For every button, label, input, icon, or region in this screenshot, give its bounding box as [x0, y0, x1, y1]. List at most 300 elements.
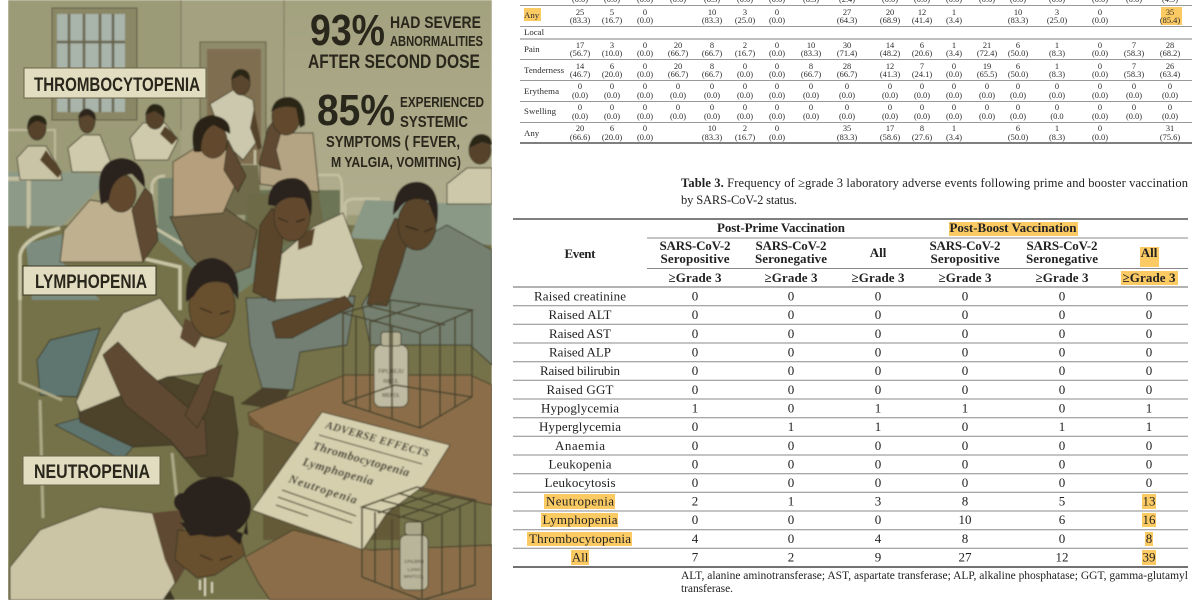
table 3 header: Seropositive	[930, 251, 1000, 266]
adverse effects paper: Lymphopenia	[300, 454, 375, 488]
row: swelling: (0.0)	[572, 112, 588, 121]
row: any: 20	[886, 8, 894, 17]
stat: 85 percent systemic symptoms	[318, 94, 484, 170]
row: erythema: (0.0)	[839, 91, 855, 100]
table 3 event names: Hypoglycemia	[541, 400, 619, 416]
row: swelling: 0	[1098, 103, 1102, 112]
row: any local: (3.4)	[946, 133, 962, 142]
row: erythema: 0	[578, 82, 582, 91]
table 3 values: 0	[875, 307, 881, 322]
row: erythema: 0	[809, 82, 813, 91]
row: swelling: (0.0)	[737, 112, 753, 121]
stat: 85 percent systemic symptoms: SYSTEMIC	[400, 114, 468, 131]
table 3 values: 27	[958, 550, 972, 564]
row: erythema: (0.0)	[1126, 91, 1142, 100]
row: swelling: 0	[775, 103, 779, 112]
table 3 values: 1	[1059, 419, 1065, 434]
table 3 values: 0	[962, 419, 968, 434]
patient: foreground woman vomiting	[10, 477, 251, 600]
row: pain: (10.0)	[602, 49, 622, 58]
table 3 event names: Neutropenia	[546, 494, 614, 508]
row: any: 12	[918, 8, 926, 17]
table 3 header: SARS-CoV-2	[1026, 238, 1098, 253]
table 3 footnote: ALT, alanine aminotransferase; AST, aspartate transferase; ALP, alkaline phosphatase; GGT, gamma-glutamyl	[681, 570, 1188, 582]
table 3 values: 0	[875, 438, 881, 453]
row: erythema: 0	[610, 82, 614, 91]
row: any local: (8.3)	[1049, 133, 1065, 142]
row: erythema: 0	[1055, 82, 1059, 91]
table 3 values: 3	[875, 494, 881, 508]
table 3 values: 0	[1059, 363, 1065, 378]
row: pain: (68.2)	[1160, 49, 1180, 58]
row: erythema: (0.0)	[704, 91, 720, 100]
row: pain: (0.0)	[637, 49, 653, 58]
table 3 values: 0	[1059, 382, 1065, 397]
table 3 values: 0	[788, 400, 794, 416]
table 3 values: 0	[1146, 382, 1152, 397]
table 2 highlights	[524, 7, 1182, 25]
table 3 values: 0	[875, 512, 881, 527]
row: tenderness: 12	[886, 62, 894, 71]
table 3 values: 0	[875, 475, 881, 490]
row: swelling: 0	[710, 103, 714, 112]
table 3 header: ≥Grade 3	[668, 270, 722, 285]
row: pain: (83.3)	[801, 49, 821, 58]
row: swelling: 0	[1168, 103, 1172, 112]
row: any: 0	[775, 8, 779, 17]
row: erythema: 0	[1132, 82, 1136, 91]
table 3 header: All	[1141, 245, 1158, 260]
table 3 values: 0	[1146, 475, 1152, 490]
table 3 values: 12	[1056, 550, 1068, 564]
background beds and sheets	[8, 130, 492, 310]
row: erythema: (0.0)	[1049, 91, 1065, 100]
row: pain: 14	[886, 41, 895, 50]
table 3 header: ≥Grade 3	[1122, 270, 1176, 285]
label: thrombocytopenia: THROMBOCYTOPENIA	[34, 75, 200, 96]
row: erythema	[524, 82, 1178, 100]
table 3 header: ≥Grade 3	[938, 270, 992, 285]
table 3 values: 9	[875, 550, 881, 564]
row: any local: 10	[708, 124, 716, 133]
row: tenderness: 0	[952, 62, 956, 71]
stat: 85 percent systemic symptoms: M YALGIA, VOMITING)	[331, 154, 461, 171]
row: erythema: 0	[743, 82, 747, 91]
row: erythema: 0	[845, 82, 849, 91]
row: any local: 6	[1016, 124, 1020, 133]
table 3 values: 0	[962, 475, 968, 490]
adverse effects paper: ADVERSE EFFECTS	[323, 419, 430, 460]
vial in cage, upper: WEPOL	[382, 393, 400, 399]
row: any: 3	[743, 8, 747, 17]
row: pain: 0	[1098, 41, 1102, 50]
row: pain: 6	[920, 41, 924, 50]
row: any local: (0.0)	[769, 133, 785, 142]
row: any local: 0	[643, 124, 647, 133]
vial in cage, lower: WHITCOL	[404, 574, 425, 579]
table 3 header: ≥Grade 3	[764, 270, 818, 285]
table 3 event names: Lymphopenia	[542, 512, 618, 527]
row: tenderness: 8	[809, 62, 813, 71]
table 2 rules	[520, 6, 1192, 143]
row: pain: (58.3)	[1124, 49, 1144, 58]
table 3 footnote	[681, 570, 1188, 595]
row: swelling: (0.0)	[839, 112, 855, 121]
row: tenderness: (0.0)	[946, 70, 962, 79]
label: neutropenia	[23, 456, 160, 485]
table 3 event names: Raised ALT	[548, 307, 612, 322]
row: pain: (71.4)	[837, 49, 857, 58]
row: tenderness: 26	[1166, 62, 1174, 71]
row: any: Any	[524, 10, 540, 20]
row: tenderness: (20.0)	[602, 70, 622, 79]
table 3 values: 0	[962, 326, 968, 341]
table 3 values: 1	[692, 400, 698, 416]
row: any local: 1	[1055, 124, 1059, 133]
door	[200, 42, 266, 164]
row: any: (0.0)	[1092, 16, 1108, 25]
table 3 values: 0	[962, 382, 968, 397]
row: swelling: 0	[920, 103, 924, 112]
row: tenderness: 20	[674, 62, 682, 71]
row: any: 0	[643, 8, 647, 17]
row: pain: 0	[643, 41, 647, 50]
row: any: 25	[576, 8, 584, 17]
table 3 values: 0	[1059, 307, 1065, 322]
row: erythema: (0.0)	[737, 91, 753, 100]
row: swelling	[524, 103, 1178, 121]
row: tenderness: 7	[1132, 62, 1136, 71]
row: any: 10	[708, 8, 716, 17]
table 3 values: 0	[692, 512, 698, 527]
row: erythema: (0.0)	[979, 91, 995, 100]
table 3 values: 1	[875, 400, 881, 416]
table 3 header: SARS-CoV-2	[660, 238, 730, 253]
table 3 values: 39	[1142, 550, 1156, 564]
row: swelling: (0.0)	[704, 112, 720, 121]
row: erythema: 0	[920, 82, 924, 91]
table 3 values: 8	[1146, 531, 1152, 546]
table 3 values: 0	[1146, 344, 1152, 360]
row: tenderness: 14	[576, 62, 585, 71]
table 3 event names: Leukopenia	[548, 456, 612, 472]
row: any: (85.4)	[1160, 16, 1180, 25]
vial in cage, upper	[343, 300, 472, 428]
table 3 values: 0	[962, 344, 968, 360]
row: pain: (66.7)	[702, 49, 722, 58]
row: pain: 0	[775, 41, 779, 50]
vial in cage, upper: RIBEIL	[383, 379, 399, 385]
table 3 highlights	[527, 222, 1178, 565]
table 3 header: ≥Grade 3	[852, 270, 905, 285]
row: tenderness: (8.3)	[1049, 70, 1065, 79]
row: pain: 3	[610, 41, 614, 50]
stat: 93 percent severe abnormalities	[308, 14, 482, 68]
background patients	[17, 69, 492, 215]
table 3 values: 0	[788, 438, 794, 453]
row: erythema: (0.0)	[946, 91, 962, 100]
row: swelling: (0.0)	[769, 112, 785, 121]
row: swelling: 0	[643, 103, 647, 112]
row: tenderness: (0.0)	[637, 70, 653, 79]
table 3 values: 1	[788, 494, 794, 508]
row: swelling: (0.0)	[604, 112, 620, 121]
row: any: (25.0)	[735, 16, 755, 25]
label: lymphopenia	[23, 266, 156, 295]
row: pain: (0.0)	[769, 49, 785, 58]
row: any local: 31	[1166, 124, 1174, 133]
table 3 header: All	[870, 245, 887, 260]
stat: 93 percent severe abnormalities: HAD SEVERE	[390, 13, 481, 32]
table 3 values: 0	[1059, 531, 1065, 546]
row: swelling: (0.0	[1050, 112, 1064, 121]
table 3 values: 0	[692, 382, 698, 397]
row: erythema: (0.0)	[1162, 91, 1178, 100]
table 3 values: 0	[692, 288, 698, 304]
table 3 values: 0	[1146, 363, 1152, 378]
patient: woman left holding head	[60, 158, 158, 262]
row: swelling: (0.0)	[914, 112, 930, 121]
table 3 values: 0	[788, 475, 794, 490]
row: erythema: (0.0)	[637, 91, 653, 100]
table 3 values: 0	[692, 419, 698, 434]
row: erythema: 0	[985, 82, 989, 91]
row: pain: 28	[1166, 41, 1174, 50]
table 3 footnote: transferase.	[681, 583, 733, 595]
row: erythema: 0	[888, 82, 892, 91]
row: pain: 7	[1132, 41, 1136, 50]
row: erythema: (0.0)	[769, 91, 785, 100]
row: any: (64.3)	[837, 16, 857, 25]
table 3 header: SARS-CoV-2	[756, 238, 826, 253]
table 3 values: 0	[875, 456, 881, 472]
table 3 caption: Table 3. Frequency of ≥grade 3 laboratory adverse events following prime and booster vaccination	[681, 176, 1189, 190]
table 3 values: 0	[788, 307, 794, 322]
row: any: (41.4)	[912, 16, 932, 25]
row: pain: 10	[807, 41, 815, 50]
table 3 values: 1	[1146, 419, 1152, 434]
table 3 values: 0	[1146, 307, 1152, 322]
row: any local: (20.0)	[602, 133, 622, 142]
patient: man with white shirt	[240, 178, 363, 410]
row: swelling: 0	[676, 103, 680, 112]
table 3 values: 0	[692, 307, 698, 322]
table 3 header: ≥Grade 3	[1036, 270, 1089, 285]
patient: woman seated centre	[170, 115, 257, 282]
row: tenderness: 0	[643, 62, 647, 71]
table 3 values: 0	[875, 363, 881, 378]
row: any: 35	[1166, 8, 1174, 17]
table 3 values: 0	[1059, 475, 1065, 490]
row: any: (83.3)	[1008, 16, 1028, 25]
table 3 values: 0	[692, 475, 698, 490]
row: pain: 21	[983, 41, 991, 50]
row: any local: (83.3)	[702, 133, 722, 142]
row: swelling: 0	[888, 103, 892, 112]
window	[52, 8, 137, 120]
row: tenderness: 6	[610, 62, 614, 71]
table 3 header	[564, 220, 1176, 285]
panel: hospital ward illustration	[8, 0, 492, 600]
table 3 values: 4	[875, 531, 882, 546]
row: tenderness: 8	[710, 62, 714, 71]
row: erythema: 0	[1098, 82, 1102, 91]
row: tenderness: 19	[983, 62, 991, 71]
row: tenderness: (63.4)	[1160, 70, 1180, 79]
row: any local: Any	[524, 128, 540, 138]
row: erythema: 0	[710, 82, 714, 91]
table 3 event names: Raised AST	[549, 326, 611, 341]
row: any: 27	[843, 8, 851, 17]
row: tenderness	[524, 62, 1180, 79]
table 3 values: 0	[788, 531, 794, 546]
table 3 event names	[529, 288, 631, 564]
vial in cage, upper: FIPLIREJU	[378, 369, 404, 375]
row: pain	[524, 41, 1180, 58]
table 3 values: 0	[962, 288, 968, 304]
row: swelling: (0.0)	[946, 112, 962, 121]
row: pain: 1	[952, 41, 956, 50]
table 3 values: 0	[1059, 438, 1065, 453]
table 3 values: 0	[1059, 400, 1065, 416]
row: swelling: (0.0)	[1126, 112, 1142, 121]
row: tenderness: 0	[1098, 62, 1102, 71]
row: any local	[524, 124, 1180, 142]
row: erythema: 0	[952, 82, 956, 91]
table 3 values: 1	[1146, 400, 1152, 416]
row: swelling: (0.0)	[1010, 112, 1026, 121]
row: swelling: (0.0)	[1162, 112, 1178, 121]
clipped row above any	[572, 0, 1178, 4]
row: tenderness: (0.0)	[769, 70, 785, 79]
row: tenderness: (0.0)	[737, 70, 753, 79]
row: any local: (16.7)	[735, 133, 755, 142]
row: swelling: (0.0)	[1092, 112, 1108, 121]
row: any local: (0.0)	[637, 133, 653, 142]
adverse effects paper: Neutropenia	[286, 471, 359, 507]
row: any local: 2	[743, 124, 747, 133]
table 3 values: 0	[962, 307, 968, 322]
row: erythema: 0	[1016, 82, 1020, 91]
table 3 values: 13	[1142, 494, 1156, 508]
table 3 header: Post-Prime Vaccination	[717, 220, 846, 235]
table 3 values: 0	[1059, 344, 1065, 360]
table 3 values: 0	[962, 456, 968, 472]
table 3 values: 0	[875, 288, 881, 304]
table 3 values: 6	[1059, 512, 1066, 527]
row: swelling: 0	[985, 103, 989, 112]
table 3 values: 0	[1146, 326, 1152, 341]
table 3 values: 1	[788, 419, 794, 434]
table 3 values: 16	[1142, 512, 1156, 527]
row: swelling: (0.0)	[882, 112, 898, 121]
table 3 values: 2	[788, 550, 794, 564]
row: tenderness: 1	[1055, 62, 1059, 71]
row: erythema: 0	[676, 82, 680, 91]
row: any local: 0	[1098, 124, 1102, 133]
row: erythema: (0.0)	[572, 91, 588, 100]
row: any local: 0	[775, 124, 779, 133]
row: pain: (3.4)	[946, 49, 962, 58]
table 3 header: Seropositive	[660, 251, 730, 266]
row: any: (3.4)	[946, 16, 962, 25]
row: any: (0.0)	[769, 16, 785, 25]
table 3 values: 0	[1146, 438, 1152, 453]
row: swelling: 0	[1132, 103, 1136, 112]
row: swelling: (0.0)	[637, 112, 653, 121]
row: tenderness: 0	[775, 62, 779, 71]
row: swelling: 0	[1055, 103, 1059, 112]
row: any local: 6	[610, 124, 614, 133]
row: erythema: 0	[775, 82, 779, 91]
row: pain: (48.2)	[880, 49, 900, 58]
table 3 values: 1	[962, 400, 968, 416]
row: pain: (72.4)	[977, 49, 997, 58]
row: pain: (0.0)	[1092, 49, 1108, 58]
row: any: 10	[1014, 8, 1022, 17]
row: swelling: (0.0)	[803, 112, 819, 121]
row: tenderness: 6	[1016, 62, 1020, 71]
row: tenderness: (65.5)	[977, 70, 997, 79]
row: pain: 6	[1016, 41, 1020, 50]
row: any: (25.0)	[1047, 16, 1067, 25]
table 3 header: Post-Boost Vaccination	[950, 220, 1077, 235]
row: any local: (0.0)	[1092, 133, 1108, 142]
table 3 header: Event	[564, 246, 596, 261]
row: any: (83.3)	[702, 16, 722, 25]
table 3 values: 4	[692, 531, 699, 546]
row: swelling: 0	[743, 103, 747, 112]
row: tenderness: (0.0)	[1092, 70, 1108, 79]
row: tenderness: (66.7)	[702, 70, 722, 79]
row: any local: 8	[920, 124, 924, 133]
table 3 values: 8	[962, 494, 968, 508]
table 3 values: 0	[788, 363, 794, 378]
row: pain: 2	[743, 41, 747, 50]
table 3 values: 0	[692, 326, 698, 341]
stat: 85 percent systemic symptoms: 85%	[317, 86, 395, 135]
row: any local: (58.6)	[880, 133, 900, 142]
row: erythema: 0	[1168, 82, 1172, 91]
table 3 values: 7	[692, 550, 699, 564]
row: pain: (20.6)	[912, 49, 932, 58]
row: pain: (66.7)	[668, 49, 688, 58]
row: any local: 17	[886, 124, 894, 133]
row: tenderness: 7	[920, 62, 924, 71]
table 3: laboratory adverse events	[513, 219, 1188, 567]
row: any: (0.0)	[637, 16, 653, 25]
table 3 values: 0	[788, 512, 794, 527]
row: tenderness: 28	[843, 62, 851, 71]
stat: 85 percent systemic symptoms: SYMPTOMS ( FEVER,	[326, 134, 460, 151]
patient: woman seated right	[246, 97, 324, 245]
table 3 values: 0	[1146, 288, 1152, 304]
table 3 event names: Anaemia	[555, 438, 605, 453]
table 3 header: Seronegative	[755, 251, 827, 266]
row: swelling: 0	[952, 103, 956, 112]
table 3 values: 0	[875, 344, 881, 360]
vial in cage, lower	[362, 487, 475, 600]
table 3 values: 0	[788, 326, 794, 341]
table 3 event names: Raised creatinine	[534, 288, 626, 304]
row: pain: 17	[576, 41, 584, 50]
row: pain: 8	[710, 41, 714, 50]
row: swelling: (0.0)	[979, 112, 995, 121]
row: erythema: Erythema	[524, 86, 559, 96]
row: swelling: 0	[1016, 103, 1020, 112]
row: any: (16.7)	[602, 16, 622, 25]
row: any: 3	[1055, 8, 1059, 17]
